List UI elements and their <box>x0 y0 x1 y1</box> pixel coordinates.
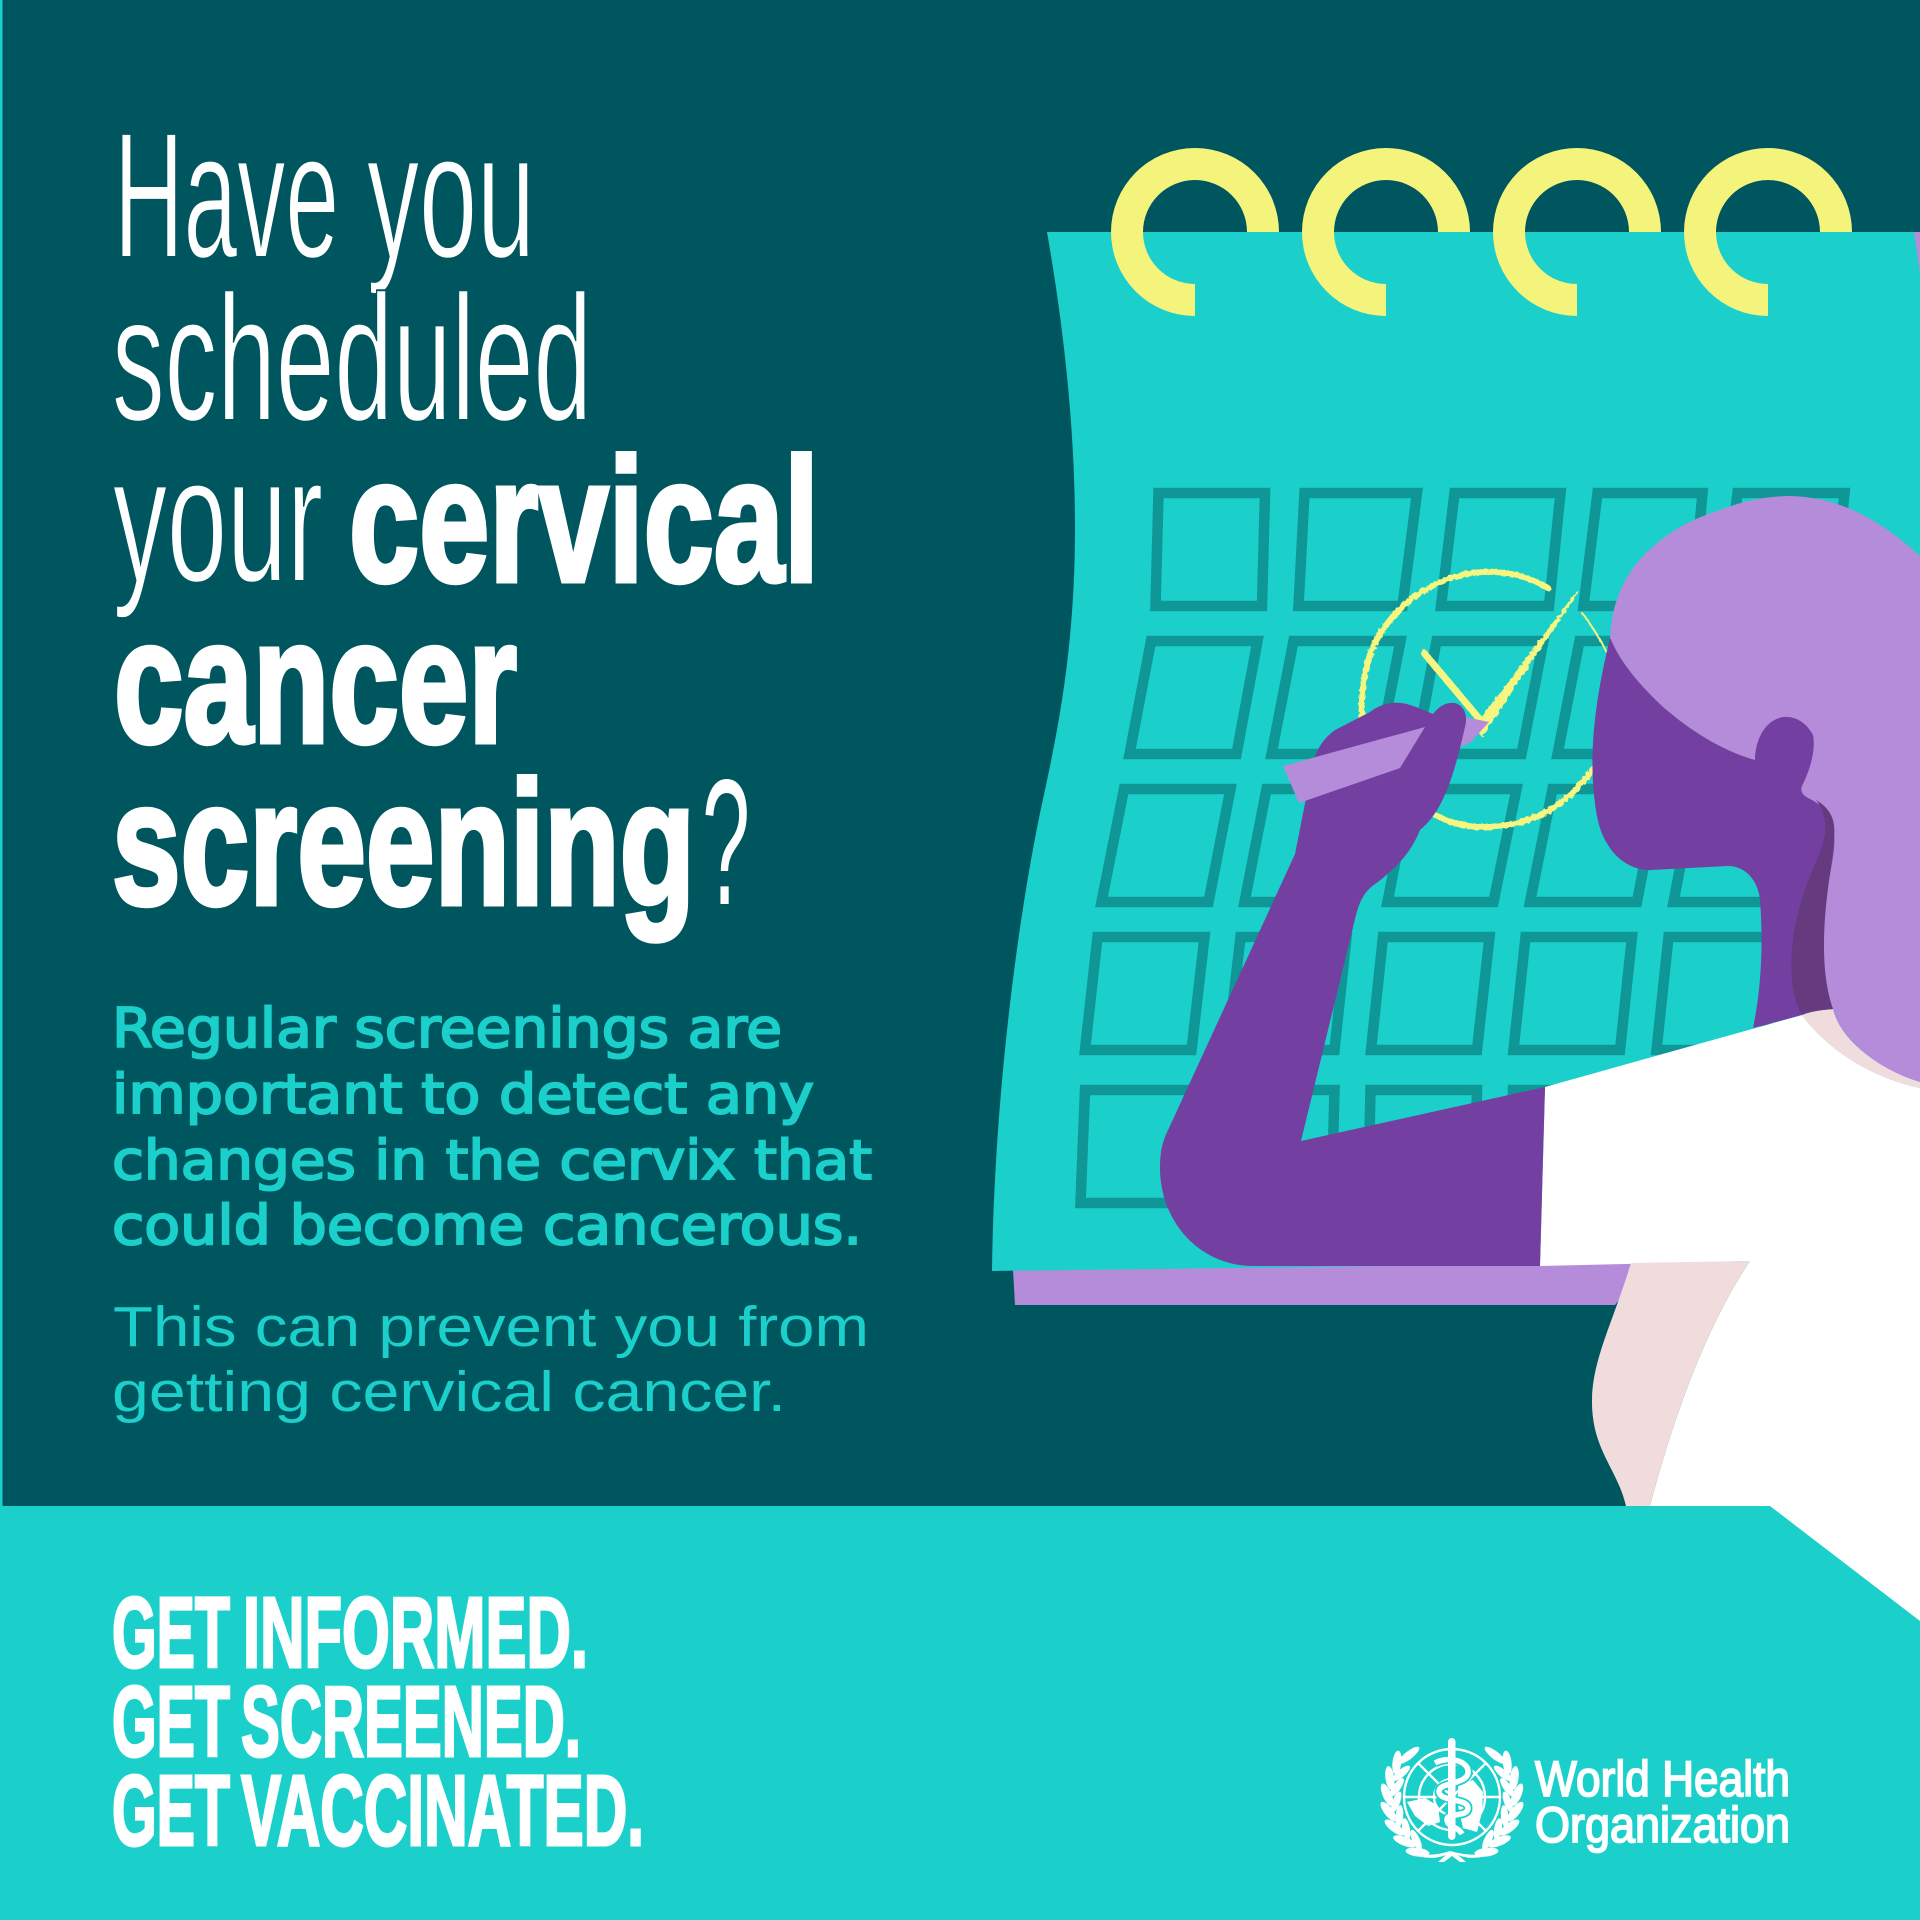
pink shirt shadow <box>1592 1261 1750 1506</box>
title line 3 light: your <box>113 419 323 619</box>
WHO wordmark: Organization <box>1535 1797 1790 1853</box>
woman writing on the calendar <box>1160 496 1920 1640</box>
staff <box>1448 1738 1456 1840</box>
face and neck <box>1592 638 1834 1028</box>
title line 5 bold: screening <box>112 746 695 942</box>
arm and hand <box>1160 703 1545 1266</box>
WHO logo <box>1378 1738 1790 1862</box>
title line 1: Have <box>114 95 339 295</box>
right laurel <box>1474 1744 1526 1858</box>
globe rings <box>1404 1749 1500 1845</box>
body text: prevention <box>112 1295 869 1424</box>
call to action: GET <box>112 1577 230 1689</box>
body text: regular screenings: changes in the cervix that <box>112 1129 872 1192</box>
yellow hand-drawn circle and check mark <box>1362 572 1607 827</box>
laurel ribbon <box>1407 1851 1497 1862</box>
snake halo <box>1435 1760 1468 1834</box>
snake <box>1435 1760 1468 1834</box>
body text: regular screenings <box>112 997 872 1257</box>
body text: regular screenings: Regular screenings are <box>112 997 782 1060</box>
icon: WHO emblem <box>1378 1738 1526 1862</box>
pink collar <box>1802 1009 1920 1088</box>
body text: prevention: This can prevent you from <box>113 1295 869 1359</box>
pencil tip <box>1455 717 1489 749</box>
WHO wordmark: World Health <box>1535 1751 1790 1807</box>
calendar day grid <box>1080 493 1844 1203</box>
calendar back page <box>1013 1262 1650 1305</box>
title <box>112 95 819 942</box>
neck shadow <box>1791 800 1834 1014</box>
title line 1: you <box>367 95 535 295</box>
body text: regular screenings: could become cancerous. <box>112 1194 862 1257</box>
title line 3 bold: cervical <box>349 423 819 619</box>
binder rings <box>1111 148 1852 316</box>
continents <box>1407 1780 1483 1832</box>
body text: prevention: getting cervical cancer. <box>112 1360 786 1424</box>
title line 2: scheduled <box>112 258 592 458</box>
call to action: VACCINATED. <box>241 1755 644 1867</box>
WHO wordmark <box>1535 1751 1790 1853</box>
hair <box>1610 496 1920 1082</box>
call to action: INFORMED. <box>243 1577 588 1689</box>
pencil body <box>1283 727 1425 803</box>
call to action: SCREENED. <box>241 1666 581 1778</box>
body text: regular screenings: important to detect any <box>112 1063 814 1126</box>
calendar front page <box>992 232 1920 1271</box>
call to action: GET <box>112 1666 230 1778</box>
title line 4 bold: cancer <box>114 584 517 780</box>
bottom teal band <box>0 1506 1920 1920</box>
white shirt <box>1540 1015 1920 1640</box>
next page corner <box>1914 232 1920 273</box>
calendar illustration <box>992 148 1920 1305</box>
title: ? <box>702 742 750 942</box>
call to action: GET <box>112 1755 230 1867</box>
call to action <box>112 1577 644 1867</box>
left laurel <box>1378 1744 1430 1858</box>
